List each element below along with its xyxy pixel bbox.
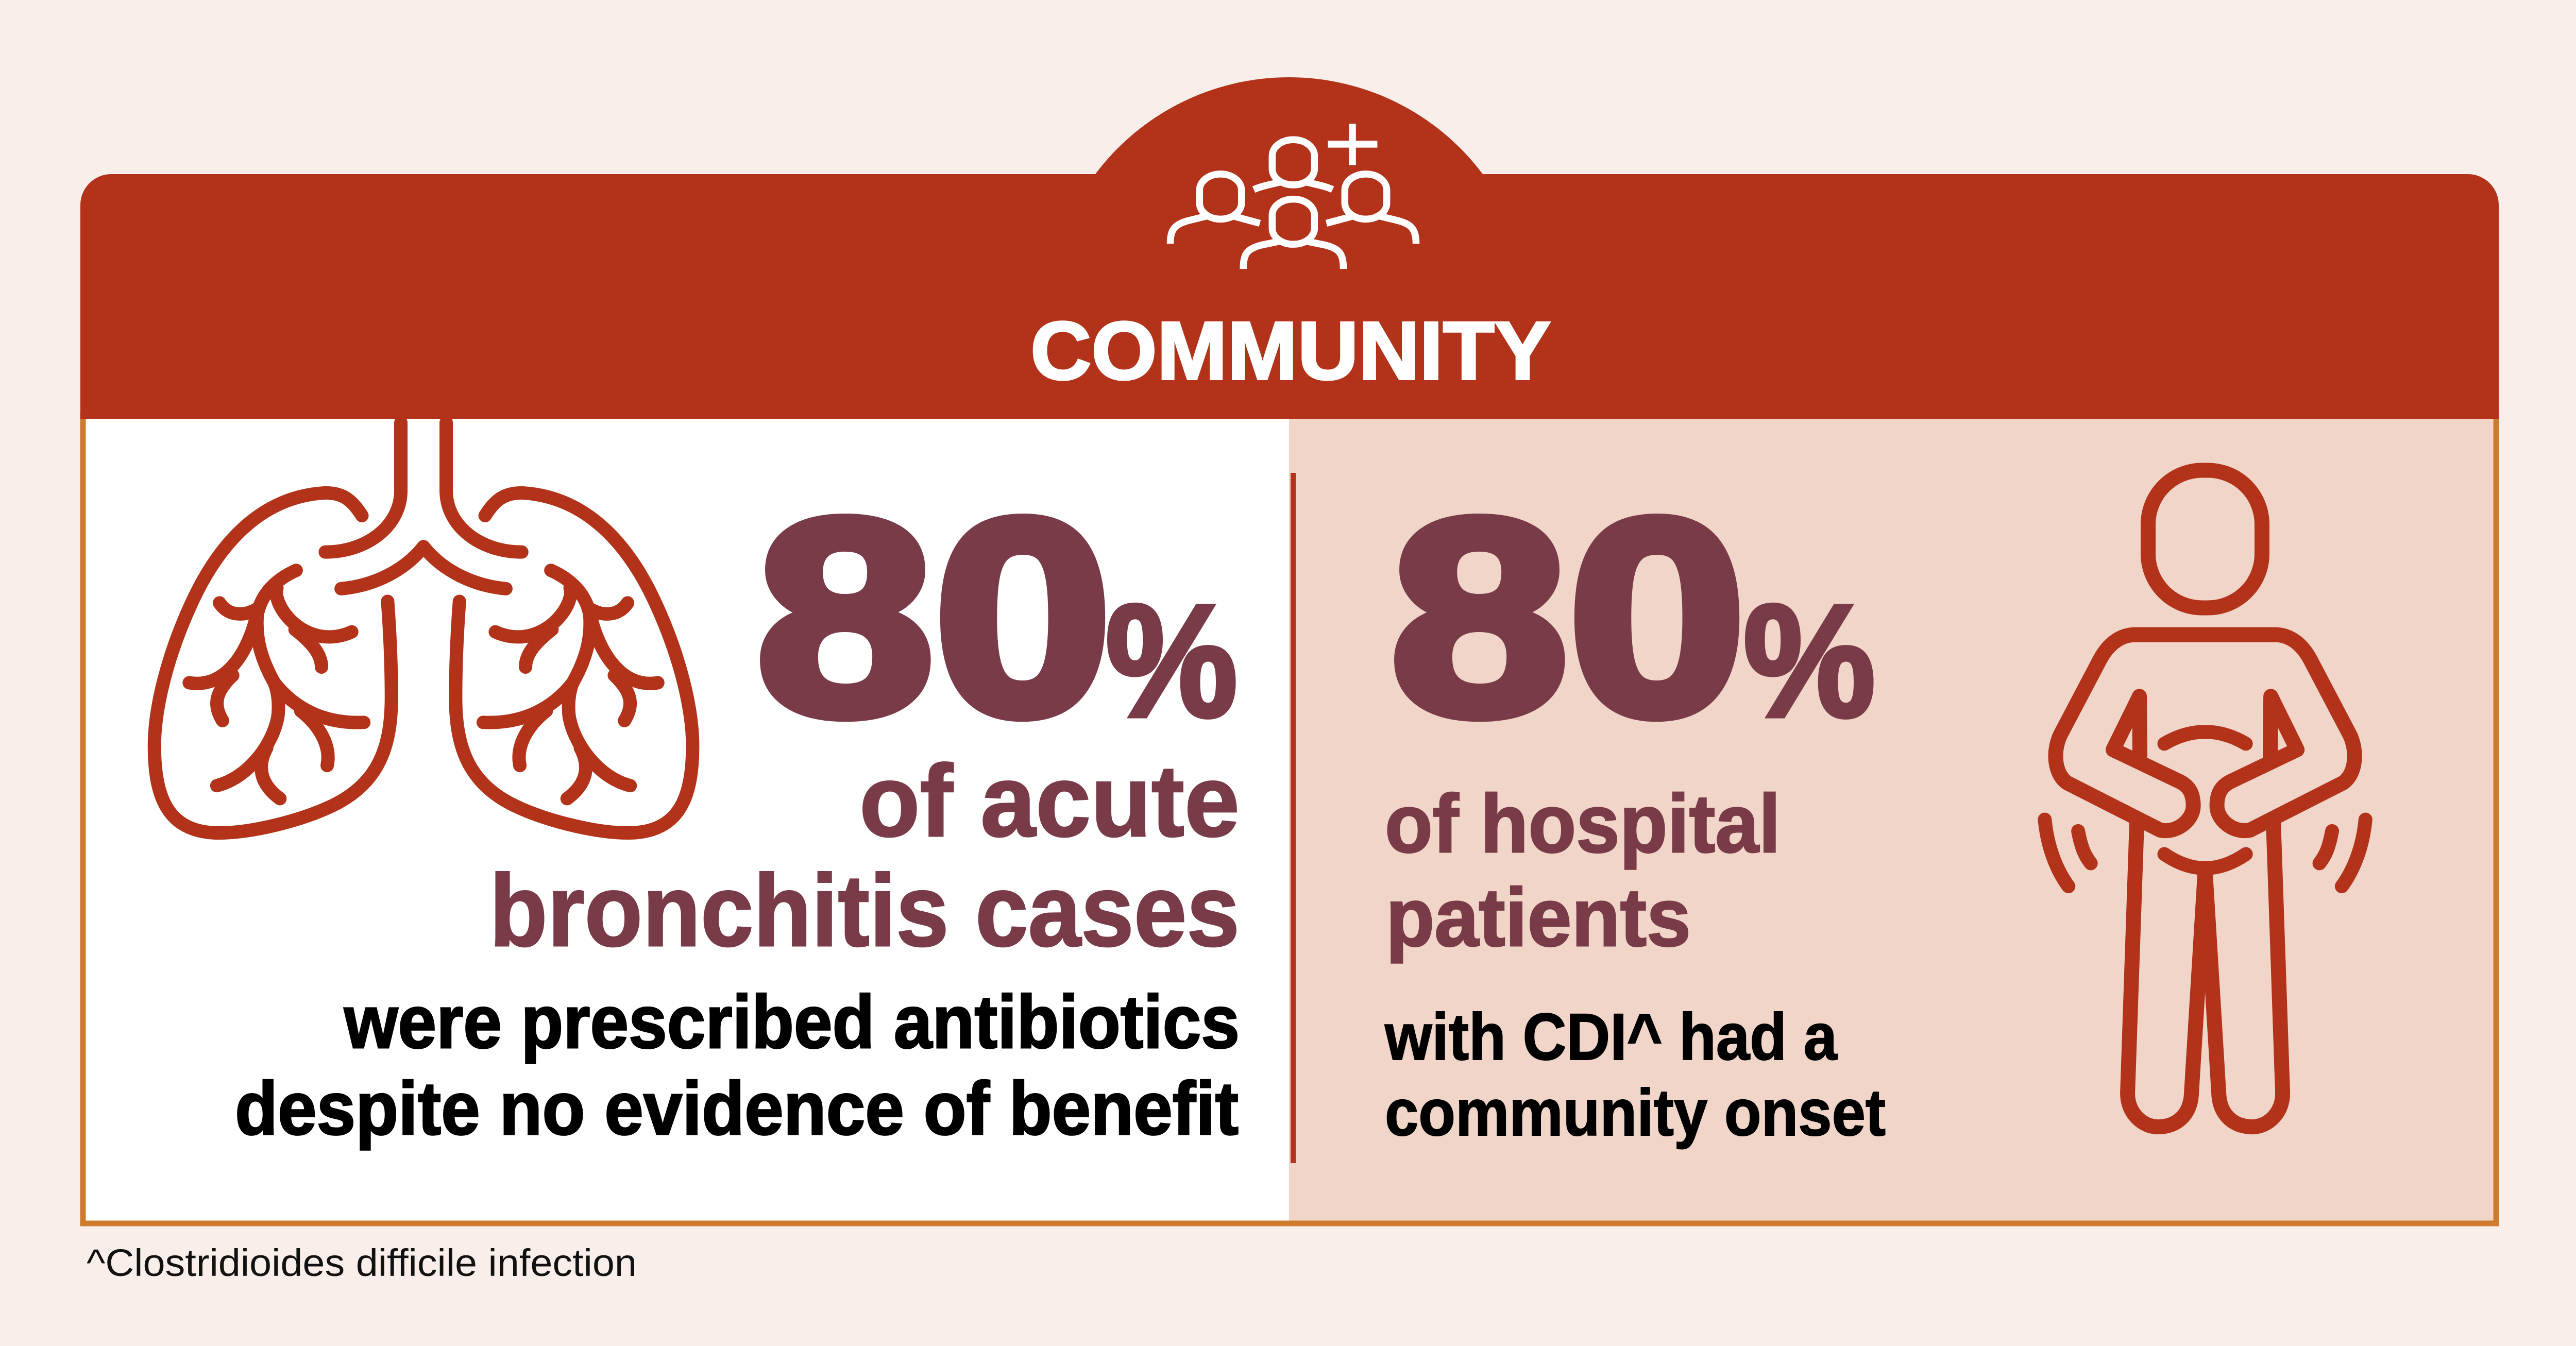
stat: left percent: % xyxy=(1106,571,1238,750)
text: of acute: of acute xyxy=(859,744,1240,858)
stat: left 80: 80 xyxy=(756,462,1112,773)
text: bronchitis cases: bronchitis cases xyxy=(489,854,1240,967)
header band with arch xyxy=(80,77,2499,419)
footnote: ^Clostridioides difficile infection xyxy=(87,1241,637,1284)
panel: left white panel xyxy=(82,412,1289,1223)
text: despite no evidence of benefit: despite no evidence of benefit xyxy=(235,1066,1239,1150)
panel: community card xyxy=(80,77,2499,1223)
icon: community people xyxy=(1170,124,1416,269)
stat: right 80: 80 xyxy=(1391,462,1746,773)
text: community onset: community onset xyxy=(1385,1076,1886,1150)
card orange border xyxy=(83,412,2496,1223)
icon: lungs xyxy=(155,422,692,833)
text: patients: patients xyxy=(1386,871,1691,963)
text: of hospital: of hospital xyxy=(1385,777,1781,870)
text: with CDI had a: with CDI^ had a xyxy=(1384,1000,1838,1074)
icon: person with stomach pain xyxy=(2045,635,2365,1127)
stat: right percent: % xyxy=(1743,571,1875,750)
panel: right tinted panel xyxy=(1289,412,2496,1223)
divider xyxy=(1291,473,1296,1163)
head of person xyxy=(2148,470,2262,608)
heading: community: COMMUNITY xyxy=(1030,304,1551,397)
text: were prescribed antibiotics: were prescribed antibiotics xyxy=(344,980,1240,1064)
